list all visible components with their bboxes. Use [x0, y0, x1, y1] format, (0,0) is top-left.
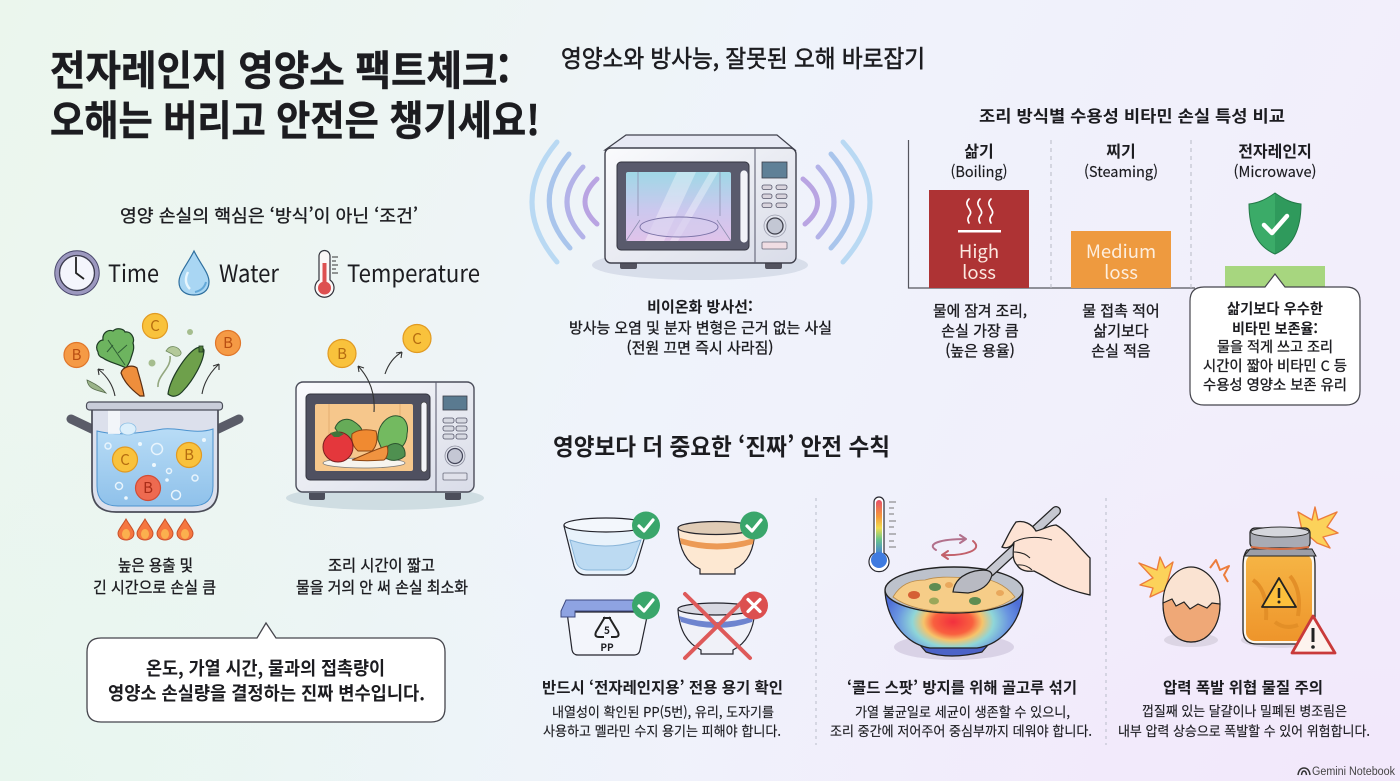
text: container rule [542, 676, 783, 740]
control panel [436, 382, 467, 492]
title: 전자레인지 영양소 팩트체크: [50, 37, 510, 97]
heading: safety rules: 영양보다 더 중요한 ‘진짜’ 안전 수칙 [553, 428, 890, 462]
icon: clock [55, 251, 99, 295]
illustration: container checks [561, 512, 768, 658]
text: pressure explosion rule: 압력 폭발 위협 물질 주의 [1163, 676, 1323, 698]
label: Water: Water [219, 254, 280, 289]
caption: boiling: 높은 용출 및 [118, 552, 193, 576]
bar: boiling high loss: High [959, 238, 999, 264]
callout: microwave retention: 비타민 보존율: [1232, 318, 1318, 339]
callout: real variables [87, 623, 445, 722]
caption: microwave: 물을 거의 안 써 손실 최소화 [296, 574, 468, 598]
text: pressure explosion rule: 내부 압력 상승으로 폭발할 수 있어 위험합니다. [1118, 720, 1370, 740]
chart axes and dividers [908, 140, 1195, 288]
vegetables on a plate [323, 416, 408, 468]
vitamin coins above the pot: B [223, 332, 233, 353]
bar: steaming medium loss [1071, 231, 1171, 288]
bowl shadow [894, 634, 1014, 660]
icon: burst small [1210, 560, 1229, 582]
caption: microwave [296, 552, 468, 598]
icon: water drop [179, 251, 209, 295]
icon: sealed jar [1241, 527, 1317, 648]
column labels: 전자레인지 [1238, 138, 1312, 162]
bar: boiling high loss [929, 190, 1029, 288]
icon: melamine bowl not allowed [678, 592, 768, 658]
icon: stirring arrows [933, 535, 976, 559]
text: cold spot rule [830, 676, 1092, 740]
icon: warning triangle [1292, 616, 1335, 653]
icon: ceramic bowl ok [678, 512, 768, 574]
panel: vitamin loss chart [908, 103, 1360, 405]
icon: cracked egg [1163, 567, 1220, 647]
hand [1002, 521, 1090, 595]
pot rim [86, 402, 222, 410]
title: 오해는 버리고 안전은 챙기세요! [50, 87, 540, 147]
text: non-ionizing radiation: (전원 끄면 즉시 사라짐) [627, 337, 773, 358]
text: non-ionizing radiation [569, 296, 832, 358]
text: boiling description: 물에 잠겨 조리, [933, 300, 1027, 321]
callout: microwave retention: 수용성 영양소 보존 유리 [1203, 374, 1347, 395]
vitamin coins B and C [328, 324, 431, 368]
panel: safety rules [542, 428, 1370, 745]
text: boiling description: (높은 용율) [945, 340, 1015, 361]
spoon [953, 511, 1056, 593]
icon: rainbow thermometer [869, 497, 896, 572]
text: cold spot rule: 조리 중간에 저어주어 중심부까지 데워야 합니다. [830, 720, 1092, 740]
callout: microwave retention: 시간이 짧아 비타민 C 등 [1203, 355, 1347, 376]
vitamin coins in water [112, 442, 202, 500]
icon: burst left [1139, 557, 1173, 597]
text: pressure explosion rule [1118, 676, 1370, 740]
text: steaming description [1082, 300, 1160, 361]
text: cold spot rule: ‘콜드 스팟’ 방지를 위해 골고루 섞기 [847, 676, 1077, 698]
vitamin coins above the pot: C [150, 315, 160, 336]
vitamin coins in water: B [184, 444, 194, 465]
icon: PP container ok: 5 [604, 622, 610, 637]
vitamin coins B and C: C [412, 328, 422, 349]
column labels: 찌기 [1106, 138, 1136, 162]
illustration: egg and sealed jar [1139, 507, 1338, 653]
heading: conditions: 영양 손실의 핵심은 ‘방식’이 아닌 ‘조건’ [120, 203, 418, 228]
illustration: boiling pot [64, 314, 240, 540]
microwave door [306, 394, 430, 480]
vitamin coins above the pot: B [72, 344, 82, 365]
microwave shadow [286, 486, 484, 510]
bar: steaming medium loss: loss [1104, 259, 1138, 285]
icon: PP container ok: PP [600, 639, 614, 654]
bar: steaming medium loss: Medium [1086, 238, 1156, 264]
caption: boiling [93, 552, 216, 598]
column labels: (Steaming) [1084, 161, 1158, 182]
bowl with heat map [885, 567, 1023, 656]
callout: real variables: 온도, 가열 시간, 물과의 접촉량이 [146, 655, 385, 681]
bar: microwave low loss [1225, 266, 1325, 288]
pot handles [71, 419, 239, 429]
caption: microwave: 조리 시간이 짧고 [328, 552, 435, 576]
illustration: microwave with vegetables [286, 324, 484, 510]
heading: radiation: 영양소와 방사능, 잘못된 오해 바로잡기 [561, 39, 925, 74]
vitamin coins above the pot [64, 314, 240, 368]
callout: microwave retention: 삶기보다 우수한 [1227, 298, 1323, 319]
icon: PP container ok [561, 592, 660, 655]
caption: boiling: 긴 시간으로 손실 큼 [93, 574, 216, 598]
watermark: Gemini Notebook: Gemini Notebook [1312, 766, 1395, 778]
vitamin coins B and C: B [337, 343, 347, 364]
text: non-ionizing radiation: 비이온화 방사선: [647, 296, 753, 317]
column labels [950, 138, 1316, 182]
vegetables [87, 329, 204, 396]
column labels: (Microwave) [1234, 161, 1316, 182]
callout: real variables: 영양소 손실량을 결정하는 진짜 변수입니다. [108, 680, 425, 706]
illustration: microwave [592, 135, 808, 280]
icon: thermometer [315, 250, 338, 297]
text: steaming description: 물 접촉 적어 [1082, 300, 1160, 321]
arrows: nutrients escaping [98, 364, 219, 396]
text: cold spot rule: 가열 불균일로 세균이 생존할 수 있으니, [855, 701, 1070, 721]
text: container rule: 내열성이 확인된 PP(5번), 유리, 도자기를 [552, 701, 774, 721]
callout: microwave retention [1190, 274, 1360, 405]
text: steaming description: 손실 적음 [1091, 340, 1151, 361]
text: container rule: 사용하고 멜라민 수지 용기는 피해야 합니다. [543, 720, 781, 740]
column labels: 삶기 [964, 138, 994, 162]
panel: nutrient loss conditions [55, 203, 484, 722]
text: steaming description: 삶기보다 [1093, 320, 1149, 341]
column labels: (Boiling) [950, 161, 1008, 182]
panel: radiation misconceptions [532, 39, 925, 358]
arrow: vitamin release [358, 352, 402, 412]
icon: microwave waves [532, 142, 870, 262]
icon: green shield [1249, 193, 1301, 254]
chart title: 조리 방식별 수용성 비타민 손실 특성 비교 [979, 103, 1285, 127]
pot body and water [92, 409, 218, 512]
text: boiling description [933, 300, 1027, 361]
microwave body [296, 382, 474, 492]
burner flames [118, 519, 193, 540]
illustration: stirring bowl [869, 497, 1090, 660]
text: boiling description: 손실 가장 큼 [941, 320, 1019, 341]
icon: burst top right [1298, 507, 1338, 548]
label: Time: Time [108, 254, 159, 289]
bar: boiling high loss: loss [962, 259, 996, 285]
text: non-ionizing radiation: 방사능 오염 및 분자 변형은 근거 없는 사실 [569, 317, 832, 338]
vitamin coins in water: B [143, 477, 153, 498]
title [50, 37, 540, 147]
icon: glass bowl ok [564, 512, 660, 575]
vitamin coins in water: C [120, 449, 130, 470]
label: Temperature: Temperature [347, 254, 480, 289]
callout: microwave retention: 물을 적게 쓰고 조리 [1217, 336, 1333, 357]
text: container rule: 반드시 ‘전자레인지용’ 전용 용기 확인 [542, 676, 783, 698]
text: pressure explosion rule: 껍질째 있는 달걀이나 밀폐된 병조림은 [1142, 700, 1347, 720]
